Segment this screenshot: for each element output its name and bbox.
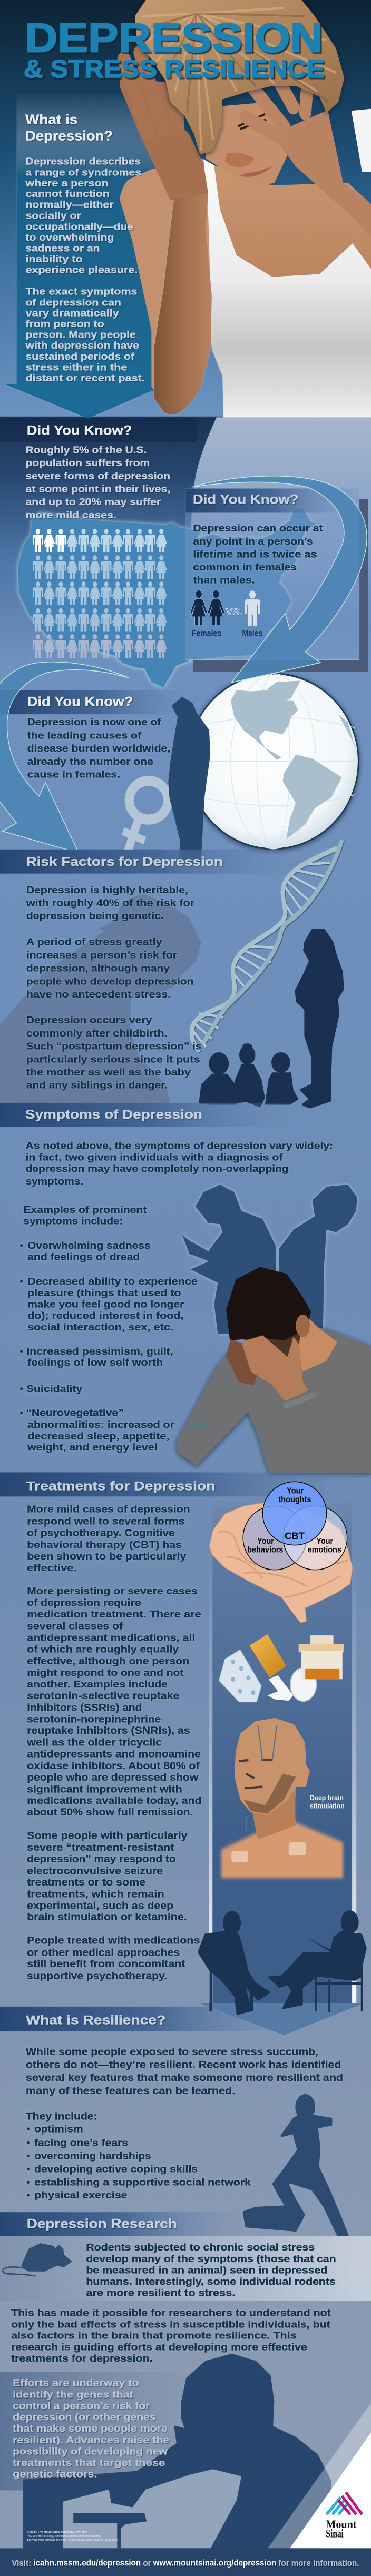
text: symptom bullets: “Neurovegetative” xyxy=(26,1407,124,1418)
text: treatments continued: severe “treatment-resistant xyxy=(27,1841,174,1853)
neck xyxy=(251,1782,296,1840)
text: risk factors: commonly after childbirth. xyxy=(26,1028,167,1039)
text: treatments continued: Some people with particularly xyxy=(27,1830,188,1841)
text: symptom bullets: Increased pessimism, guilt, xyxy=(26,1346,173,1357)
text: genes: resilient). Advances raise the xyxy=(13,2434,170,2445)
text: treatments: effective. xyxy=(27,1562,76,1573)
silhouette: therapy session xyxy=(198,1910,367,2015)
text: treatments continued: serotonin-selective reuptake xyxy=(27,1690,180,1701)
text: risk factors: and any siblings in danger. xyxy=(26,1080,168,1091)
text: risk factors: Depression occurs very xyxy=(26,1014,152,1025)
text: symptom bullets: social interaction, sex, etc. xyxy=(27,1321,173,1333)
text: resilience: optimism xyxy=(34,2123,83,2135)
text: genes: that make some people more xyxy=(13,2423,168,2434)
text: leading cause: Depression is now one of xyxy=(27,716,161,727)
text: what is depression: occupationally—due xyxy=(25,221,133,232)
text: resilience bullets xyxy=(27,2137,251,2200)
text: symptom bullets: Suicidality xyxy=(26,1383,83,1394)
bullet: sadness: and feelings of dread xyxy=(27,1251,140,1262)
text: research effects: treatments for depression. xyxy=(11,2353,153,2364)
bullet: sadness: • xyxy=(20,1240,23,1251)
text: treatments: might respond to one and not xyxy=(27,1667,184,1678)
heading: what is depression xyxy=(25,112,113,144)
panel: what is depression arrow xyxy=(4,91,170,419)
illustration: medications xyxy=(219,1634,344,1702)
text: leading cause xyxy=(27,716,170,780)
text: treatments continued xyxy=(26,1690,202,1981)
label: deep brain stimulation: Deep brain xyxy=(310,1794,344,1802)
text: what is depression: Depression describes xyxy=(25,156,141,167)
text: risk factors: Such “postpartum depression” is xyxy=(26,1041,202,1052)
heading: what is depression: What is xyxy=(25,112,77,127)
venn labels: thoughts xyxy=(278,1495,311,1504)
venn labels: Your xyxy=(316,1537,334,1546)
header bar xyxy=(0,850,308,874)
text: resilience: They include: xyxy=(26,2110,97,2122)
symptoms list and treatments section xyxy=(0,1268,371,2003)
text: what is depression: socially or xyxy=(25,210,81,221)
text: twice as common: lifetime and is twice as xyxy=(193,548,317,560)
text: genes: treatments that target these xyxy=(13,2456,165,2468)
text: resilience bullets: • xyxy=(27,2137,30,2148)
text: research effects: This has made it possible for researchers to understand not xyxy=(11,2307,331,2318)
right hand fingers xyxy=(246,47,308,136)
face shadow xyxy=(237,1331,300,1358)
title: DEPRESSION xyxy=(25,14,323,61)
copyright: but you must attribute the work to the Mount Sinai Hospital, New York. xyxy=(27,2539,119,2542)
text: genes: depression (or other genes xyxy=(13,2411,155,2423)
text: US population: at some point in their lives, xyxy=(25,483,170,495)
text: treatments continued: treatments or to some xyxy=(27,1877,146,1888)
shoulders xyxy=(221,1822,343,1878)
brain folds xyxy=(218,1532,348,1597)
text: treatments continued: or other medical approaches xyxy=(27,1947,180,1958)
face shadow xyxy=(243,1774,296,1814)
legend labels: Males xyxy=(242,629,262,638)
text: treatments continued: reuptake inhibitors (SNRIs), as xyxy=(27,1725,190,1736)
text: genes: control a person’s risk for xyxy=(13,2400,150,2411)
did you know section xyxy=(0,417,371,862)
text: treatments: More mild cases of depression xyxy=(27,1504,190,1515)
text: risk factors: depression being genetic. xyxy=(26,910,164,921)
header bar 3 xyxy=(0,690,199,714)
header bar xyxy=(0,417,197,442)
text: rodents: develop many of the symptoms (those that can xyxy=(86,2253,336,2264)
heading: did you know 1: Did You Know? xyxy=(27,423,132,438)
heading: treatments: Treatments for Depression xyxy=(26,1479,216,1493)
text: treatments continued: treatments, which remain xyxy=(27,1888,164,1900)
copyright xyxy=(27,2530,119,2542)
illustration: brain xyxy=(209,1503,353,1623)
arrow: curved arrow to risk factors xyxy=(0,662,129,853)
right hand xyxy=(241,1335,309,1401)
prescription bottles xyxy=(310,1635,334,1646)
text: treatments continued: well as the older tricyclic xyxy=(26,1736,162,1748)
text: treatments continued: experimental, such as deep xyxy=(27,1900,173,1911)
text: treatments xyxy=(27,1504,201,1690)
label: deep brain stimulation: stimulation xyxy=(310,1802,345,1810)
text: resilience: • xyxy=(27,2123,30,2135)
text: resilience: While some people exposed to severe stress succumb, xyxy=(26,2046,318,2057)
silhouette: hunched person xyxy=(0,894,201,1103)
footer bar xyxy=(0,2548,371,2576)
female symbol xyxy=(123,781,168,851)
text: treatments: been shown to be particularly xyxy=(27,1551,186,1562)
cuff xyxy=(283,1391,317,1409)
text: treatments: respond well to several forms xyxy=(27,1516,185,1527)
heading: what is resilience: What is Resilience? xyxy=(26,2013,165,2027)
diagonal band xyxy=(268,2403,371,2548)
text: treatments: behavioral therapy (CBT) has xyxy=(27,1539,182,1550)
facial features xyxy=(239,1760,272,1788)
text: symptoms intro: symptoms. xyxy=(25,1176,83,1187)
text: what is depression: to overwhelming xyxy=(25,232,114,243)
panel: did you know 2 xyxy=(186,488,359,660)
text: symptom bullets: feelings of low self worth xyxy=(27,1357,163,1368)
text: what is depression: stress either in the xyxy=(25,361,128,373)
text: risk factors: the mother as well as the baby xyxy=(26,1067,191,1078)
text: treatments: effective, although one person xyxy=(27,1655,189,1666)
text: treatments: of which are roughly equally xyxy=(27,1644,179,1655)
decorative teal line xyxy=(186,1426,209,1427)
text: treatments continued: still benefit from concomitant xyxy=(27,1958,186,1969)
silhouette: standing woman xyxy=(169,698,209,862)
text: twice as common: than males. xyxy=(193,574,255,586)
bullet: sadness: Overwhelming sadness xyxy=(27,1240,151,1251)
open pill bottle xyxy=(250,1634,286,1678)
title: & STRESS RESILIENCE xyxy=(24,55,325,83)
heading: depression research: Depression Research xyxy=(27,2216,177,2231)
text: symptoms intro: depression may have completely non-overlapping xyxy=(25,1163,289,1174)
text: what is depression: sustained periods of xyxy=(25,351,134,362)
shoulder and upper arm xyxy=(120,159,211,403)
text: symptom bullets: make you feel good no longer xyxy=(27,1298,184,1310)
text: risk factors: have no antecedent stress. xyxy=(26,989,171,1000)
text: symptom bullets: do); reduced interest in food, xyxy=(27,1310,183,1321)
treatments continued and resilience section xyxy=(0,1690,367,2135)
text: risk factors: with roughly 40% of the risk for xyxy=(26,897,194,909)
text: genes: possibility of developing new xyxy=(13,2445,168,2457)
vs label: VS. xyxy=(226,607,242,617)
text: what is depression: from person to xyxy=(25,318,104,329)
hair xyxy=(227,1268,310,1339)
text: treatments continued: medications available today, and xyxy=(27,1795,202,1806)
text: US population: population suffers from xyxy=(25,457,150,468)
text: resilience bullets: facing one’s fears xyxy=(34,2137,128,2148)
text: leading cause: already the number one xyxy=(27,756,153,767)
text: twice as common: common in females xyxy=(193,561,297,573)
shirt xyxy=(202,159,371,421)
panel: rodent band xyxy=(0,2236,371,2301)
text: what is depression: sadness or an xyxy=(25,242,100,254)
illustration: woman holding her head xyxy=(120,0,371,421)
silhouette: runner xyxy=(243,2095,348,2236)
text: treatments: medication treatment. There are xyxy=(27,1608,201,1620)
text: rodents: be measured in an animal) seen in depressed xyxy=(86,2264,327,2276)
logo: Mount Sinai xyxy=(326,2492,362,2540)
panel shadow xyxy=(193,499,368,672)
text: US population: Roughly 5% of the U.S. xyxy=(25,444,147,456)
header bar xyxy=(0,2007,308,2031)
arrow: curved arrow to globe xyxy=(192,476,367,683)
silhouette: two people back to back xyxy=(182,1185,357,1334)
text: symptoms intro xyxy=(23,1140,333,1227)
sweater xyxy=(178,1328,371,1472)
text: risk factors xyxy=(26,884,202,1091)
implant patches xyxy=(231,1842,306,1862)
text: research effects: only the bad effects of stress in susceptible individuals, but xyxy=(11,2318,330,2330)
text: what is depression: normally—either xyxy=(25,199,114,210)
lower panel background xyxy=(0,2372,237,2490)
text: resilience bullets: • xyxy=(27,2176,30,2188)
logo wordmark xyxy=(326,2518,357,2540)
text: what is depression: distant or recent past. xyxy=(25,372,145,383)
right arm xyxy=(272,110,371,236)
text: resilience bullets: developing active coping skills xyxy=(34,2163,198,2175)
venn labels: Your xyxy=(287,1487,304,1496)
title xyxy=(24,14,325,83)
text: US population: more mild cases. xyxy=(25,509,116,520)
forearm xyxy=(154,193,212,414)
map of the United States xyxy=(18,508,316,687)
pictogram: people grid xyxy=(33,529,167,658)
heading: risk factors: Risk Factors for Depression xyxy=(26,855,223,868)
text: resilience bullets: • xyxy=(27,2189,30,2200)
text: rodents: Rodents subjected to chronic social stress xyxy=(86,2242,315,2253)
DNA helix xyxy=(192,840,342,1051)
text: symptom bullets: • xyxy=(20,1276,23,1287)
text: symptom bullets: Decreased ability to experience xyxy=(27,1276,198,1287)
hero section xyxy=(4,0,371,421)
spilled pills xyxy=(267,1675,294,1701)
text: symptom bullets: pleasure (things that used to xyxy=(27,1287,181,1298)
text: treatments continued: depression” may respond to xyxy=(27,1853,176,1864)
face xyxy=(206,102,291,190)
left hand xyxy=(226,1339,258,1385)
text: symptoms intro: Examples of prominent xyxy=(23,1204,147,1215)
venn labels xyxy=(247,1487,341,1555)
header bar 2 xyxy=(0,1103,308,1127)
text: resilience bullets: physical exercise xyxy=(34,2189,128,2200)
text: symptoms intro: symptoms include: xyxy=(23,1216,123,1227)
text: treatments continued: oxidase inhibitors. About 80% of xyxy=(27,1760,200,1771)
text: treatments continued: electroconvulsive seizure xyxy=(27,1865,163,1877)
text: treatments continued: supportive psychotherapy. xyxy=(27,1970,167,1981)
silhouette: scientist with microscope xyxy=(24,2355,331,2548)
bottle lid xyxy=(290,1668,316,1701)
electrode leads xyxy=(246,1725,296,1831)
text: what is depression: experience pleasure. xyxy=(25,264,138,275)
text: symptom bullets: decreased sleep, appetite, xyxy=(27,1430,169,1442)
heading: did you know 3: Did You Know? xyxy=(27,694,133,709)
text: US population: and up to 20% may suffer xyxy=(25,496,161,507)
text: treatments continued: antidepressants and monoamine xyxy=(27,1748,201,1760)
text: treatments continued: inhibitors (SSRIs) and xyxy=(27,1702,142,1713)
text: twice as common xyxy=(193,522,323,586)
text: resilience bullets: overcoming hardships xyxy=(34,2150,151,2162)
text: research effects xyxy=(11,2307,331,2364)
footer text: Visit: icahn.mssm.edu/depression or www.mountsinai.org/depression for more information. xyxy=(12,2559,359,2568)
text: what is depression: The exact symptoms xyxy=(25,285,138,297)
text: symptom bullets: • xyxy=(20,1346,23,1357)
text: risk factors: particularly serious since it puts xyxy=(26,1054,200,1065)
bullet: sadness xyxy=(20,1240,151,1262)
text: resilience: others do not—they’re resilient. Recent work has identified xyxy=(26,2059,341,2070)
text: genes: identify the genes that xyxy=(13,2389,133,2400)
copyright: © 2014 The Mount Sinai Hospital, New York xyxy=(27,2530,88,2534)
text: risk factors: people who develop depression xyxy=(26,976,193,987)
text: treatments continued: about 50% show full remission. xyxy=(27,1807,193,1818)
venn labels: CBT xyxy=(285,1531,305,1542)
text: symptom bullets: • xyxy=(20,1383,23,1394)
text: symptoms intro: in fact, two given individuals with a diagnosis of xyxy=(25,1151,283,1163)
text: risk factors: increases a person’s risk for xyxy=(26,950,177,961)
illustration: man covering his face xyxy=(178,1268,371,1472)
panel: treatments column xyxy=(209,1496,356,2003)
logo wordmark: Mount xyxy=(326,2518,357,2531)
text: leading cause: disease burden worldwide, xyxy=(27,743,170,754)
research section xyxy=(0,2095,371,2576)
text: what is depression: of depression can xyxy=(25,297,121,308)
text: resilience bullets: establishing a supportive social network xyxy=(34,2176,251,2188)
text: twice as common: Depression can occur at xyxy=(193,522,323,534)
silhouette: three children xyxy=(199,1043,299,1108)
text: risk factors: Depression is highly heritable, xyxy=(26,884,188,895)
legend labels: Females xyxy=(192,629,221,638)
text: research effects: research is guiding efforts at developing more effective xyxy=(11,2341,307,2353)
header bar xyxy=(0,2212,243,2236)
text: leading cause: the leading causes of xyxy=(27,729,141,741)
heading: symptoms: Symptoms of Depression xyxy=(25,1108,202,1121)
shirt strap xyxy=(352,109,371,172)
neck xyxy=(294,1312,337,1371)
text: leading cause: cause in females. xyxy=(27,768,120,780)
text: rodents xyxy=(86,2242,336,2298)
diagram: CBT venn xyxy=(243,1482,347,1570)
text: treatments: another. Examples include xyxy=(27,1679,168,1690)
text: resilience bullets: • xyxy=(27,2163,30,2175)
text: what is depression: person. Many people xyxy=(25,329,136,340)
head xyxy=(236,1719,309,1814)
text: rodents: humans. Interestingly, some individual rodents xyxy=(86,2276,336,2287)
text: resilience xyxy=(26,2046,343,2135)
text: US population: severe forms of depression xyxy=(25,470,170,481)
panel arrow point xyxy=(199,2003,364,2035)
heading: what is depression: Depression? xyxy=(25,129,113,144)
label: deep brain stimulation xyxy=(310,1794,345,1810)
text: treatments: antidepressant medications, all xyxy=(27,1632,195,1643)
white corner xyxy=(290,2432,371,2548)
text: what is depression xyxy=(25,156,145,383)
text: genes: genetic factors. xyxy=(13,2468,97,2480)
text: US population xyxy=(25,444,170,520)
text: what is depression: cannot function xyxy=(25,188,110,199)
text: resilience: many of these features can be learned. xyxy=(26,2085,235,2096)
text: what is depression: vary dramatically xyxy=(25,308,119,319)
heading: did you know 2: Did You Know? xyxy=(193,492,299,507)
venn labels: emotions xyxy=(308,1546,341,1555)
left hand xyxy=(120,52,208,200)
text: treatments: More persisting or severe cases xyxy=(27,1585,198,1596)
chest skin xyxy=(214,165,371,277)
silhouette: pregnant woman xyxy=(296,930,343,1108)
ear xyxy=(296,1315,310,1337)
text: what is depression: with depression have xyxy=(25,340,139,351)
icon: two females vs one male xyxy=(190,590,262,638)
text: symptom bullets: • xyxy=(20,1407,23,1418)
logo wordmark: Sinai xyxy=(326,2527,344,2540)
text: what is depression: where a person xyxy=(25,177,109,189)
venn labels: behaviors xyxy=(247,1546,283,1555)
text: what is depression: a range of syndromes xyxy=(25,166,141,178)
illustration: deep brain stimulation head xyxy=(221,1719,345,1878)
text: rodents: are more resilient to stress. xyxy=(86,2287,235,2298)
text: symptoms intro: As noted above, the symptoms of depression vary widely: xyxy=(25,1140,333,1151)
text: treatments: of psychotherapy. Cognitive xyxy=(27,1527,175,1538)
text: genes: Efforts are underway to xyxy=(13,2377,139,2389)
silhouette: mouse xyxy=(3,2243,72,2276)
light disc background xyxy=(191,417,371,663)
text: risk factors: depression, although many xyxy=(26,963,170,974)
text: treatments: of depression require xyxy=(27,1597,141,1608)
text: symptom bullets: abnormalities: increased or xyxy=(27,1419,174,1430)
text: what is depression: inability to xyxy=(25,253,83,264)
text: treatments continued: People treated with medications xyxy=(27,1935,200,1946)
text: treatments: several classes of xyxy=(27,1621,123,1632)
text: twice as common: any point in a person’s xyxy=(193,536,313,547)
text: treatments continued: brain stimulation or ketamine. xyxy=(27,1911,187,1923)
panel header xyxy=(186,489,359,512)
globe xyxy=(188,674,358,849)
text: research effects: also factors in the brain that promote resilience. This xyxy=(11,2330,297,2341)
text: treatments continued: serotonin-norepinephrine xyxy=(27,1713,161,1725)
blister packs xyxy=(219,1650,261,1702)
hair xyxy=(135,0,344,154)
text: symptom bullets: weight, and energy level xyxy=(27,1442,158,1453)
text: treatments continued: significant improvement with xyxy=(27,1783,182,1795)
text: resilience bullets: • xyxy=(27,2150,30,2162)
copyright: You are free to copy, distribute and transmit this content, xyxy=(27,2535,101,2538)
text: symptom bullets xyxy=(20,1276,198,1453)
legend labels xyxy=(192,629,262,638)
text: genes xyxy=(13,2377,170,2480)
risk factors and symptoms section xyxy=(0,840,357,1334)
text: risk factors: A period of stress greatly xyxy=(26,936,162,948)
text: treatments continued: people who are depressed show xyxy=(27,1772,199,1783)
text: resilience: several key features that make someone more resilient and xyxy=(26,2071,343,2083)
venn labels: Your xyxy=(257,1537,274,1546)
header bar xyxy=(0,1472,371,1496)
